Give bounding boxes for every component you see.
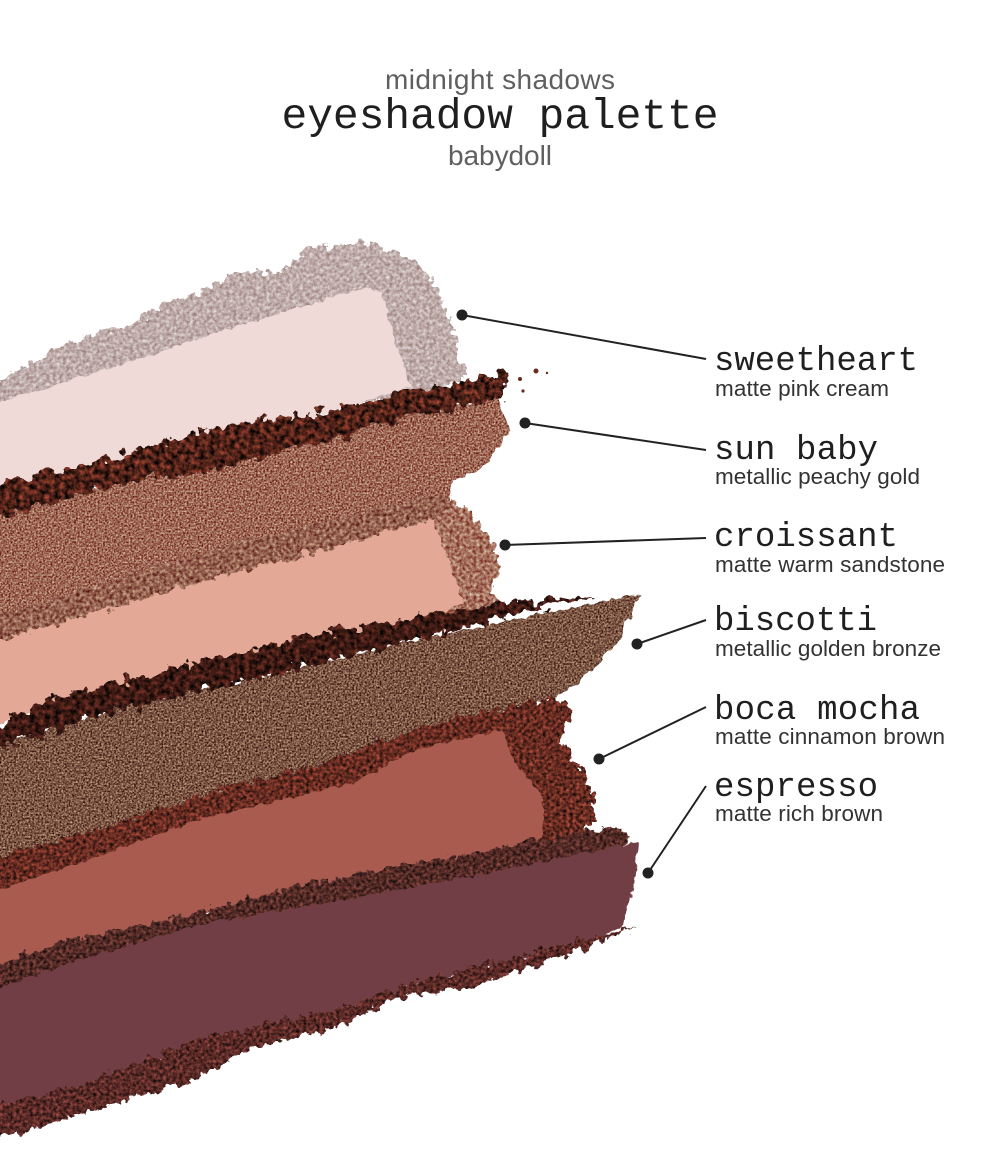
callout: espresso: [642, 769, 883, 878]
label: croissant: croissant: [714, 519, 898, 557]
subtitle: collection name: midnight shadows: [385, 64, 615, 95]
finish: croissant: matte warm sandstone: [715, 552, 945, 577]
finish: sweetheart: matte pink cream: [715, 376, 889, 401]
callout: biscotti: [632, 603, 941, 661]
swatch: sun baby: [0, 368, 548, 649]
swatch: espresso: [0, 827, 638, 1145]
leader line: sweetheart: [456, 310, 706, 359]
label: boca mocha: boca mocha: [714, 692, 920, 730]
callout: boca mocha: [594, 692, 945, 764]
label: espresso: espresso: [714, 769, 878, 807]
title block: [282, 64, 718, 171]
subtitle: shade name: babydoll: [448, 140, 552, 171]
label: biscotti: biscotti: [714, 603, 877, 641]
finish: biscotti: metallic golden bronze: [715, 636, 941, 661]
swatch: biscotti: [0, 594, 640, 876]
finish: boca mocha: matte cinnamon brown: [715, 724, 945, 749]
eyeshadow swatches: [0, 243, 640, 1145]
leader line: espresso: [642, 786, 706, 878]
crumbs: sun baby: [518, 368, 548, 393]
leader line: boca mocha: [594, 707, 706, 764]
swatch: sweetheart: [0, 243, 466, 497]
label: sun baby: sun baby: [714, 432, 878, 470]
finish: espresso: matte rich brown: [715, 801, 883, 826]
title: eyeshadow palette: [282, 92, 718, 141]
finish: sun baby: metallic peachy gold: [715, 464, 920, 489]
swatch: boca mocha: [0, 697, 595, 975]
label: sweetheart: sweetheart: [714, 343, 918, 381]
callout: sun baby: [520, 418, 920, 489]
callout: sweetheart: [456, 310, 918, 401]
leader line: biscotti: [632, 620, 706, 650]
leader line: sun baby: [520, 418, 706, 450]
callout: croissant: [500, 519, 945, 577]
leader line: croissant: [500, 538, 706, 550]
swatch: croissant: [0, 490, 499, 736]
